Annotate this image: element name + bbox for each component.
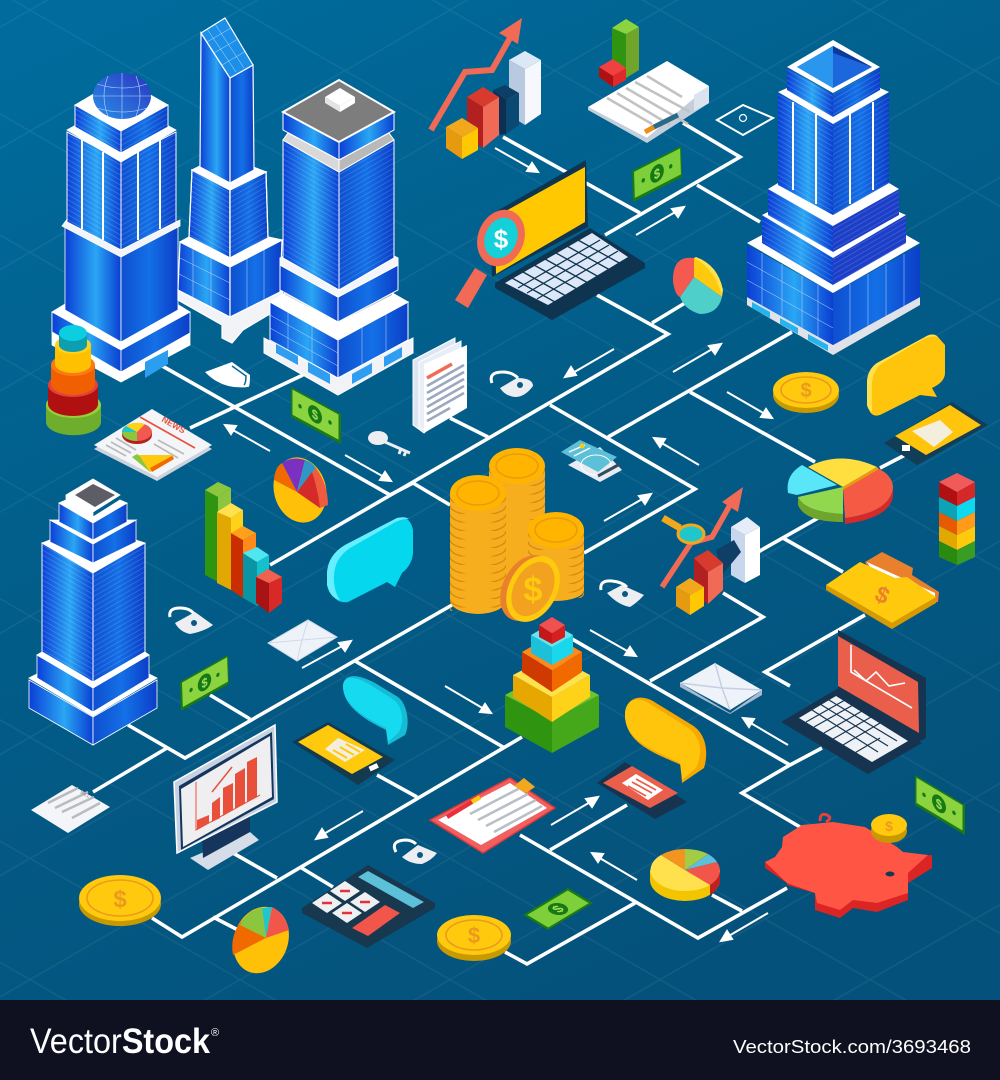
icon: small sun tag bbox=[717, 105, 773, 135]
coin: $ bbox=[468, 923, 480, 948]
pie chart: top bbox=[673, 257, 723, 314]
dome bbox=[93, 73, 151, 119]
pie chart: bottom bbox=[650, 849, 720, 901]
registered mark: ® bbox=[211, 1027, 219, 1039]
icon: money note: $ bbox=[312, 405, 318, 424]
pie chart: bottom left bbox=[224, 899, 298, 981]
coin bbox=[773, 372, 839, 413]
footer bar bbox=[0, 1000, 1000, 1080]
speech bubble: yellow center bbox=[625, 698, 706, 783]
receipt bill: BILL bbox=[79, 790, 91, 800]
bar chart: left bbox=[205, 482, 282, 613]
building: dome tower bbox=[52, 73, 190, 382]
phone: red app bbox=[597, 762, 687, 819]
icon: money note bbox=[915, 775, 965, 835]
big standing coin bbox=[489, 546, 571, 631]
pie chart: large 3d bbox=[788, 458, 893, 524]
coin: left: $ bbox=[113, 886, 127, 913]
newspaper bbox=[94, 409, 212, 481]
folder: $ bbox=[871, 580, 894, 609]
coin bbox=[437, 915, 511, 961]
coin on piggy: $ bbox=[885, 818, 893, 834]
icon: money note bbox=[523, 888, 593, 930]
icon: lock bbox=[491, 372, 533, 397]
phone: bank app right bbox=[884, 402, 988, 465]
icon: money note bbox=[632, 146, 682, 202]
document and cubes: top bbox=[588, 19, 709, 143]
laptop: red screen bbox=[783, 630, 926, 773]
receipt bill bbox=[31, 785, 110, 833]
pie chart: left bbox=[266, 451, 334, 529]
magnifier bbox=[663, 518, 704, 543]
growth chart with magnifier bbox=[662, 487, 760, 615]
speech bubble: cyan large bbox=[327, 517, 413, 602]
pyramid blocks bbox=[505, 617, 599, 753]
growth chart: top bbox=[431, 18, 541, 159]
document stack bbox=[413, 338, 467, 433]
icon: lock bbox=[170, 608, 213, 634]
icon: money note: $ bbox=[548, 903, 568, 915]
building: right hollow tower bbox=[747, 40, 920, 355]
calculator bbox=[302, 865, 435, 948]
credit cards bbox=[561, 440, 622, 482]
roof hut bbox=[325, 88, 355, 112]
building: flat roof tower bbox=[264, 80, 413, 395]
icon: lock bbox=[394, 840, 437, 864]
icon: money note: $ bbox=[201, 674, 208, 692]
icon: lock bbox=[601, 581, 644, 607]
monitor with chart bbox=[174, 725, 277, 870]
icon: money note bbox=[180, 655, 229, 711]
icon: money note: $ bbox=[654, 164, 660, 183]
coin: $ bbox=[800, 380, 812, 402]
icon: envelope left bbox=[268, 620, 337, 661]
magnifier bbox=[455, 202, 533, 308]
folder bbox=[826, 552, 939, 629]
icon: envelope center bbox=[680, 663, 762, 714]
speech bubble: yellow top right bbox=[867, 334, 945, 416]
magnifier: $ bbox=[494, 224, 509, 254]
small direction arrows bbox=[225, 148, 788, 941]
coin on piggy bbox=[871, 814, 907, 843]
brand logo text: VectorStock bbox=[30, 1022, 210, 1061]
big standing coin: $ bbox=[524, 571, 543, 609]
stacked color column bbox=[939, 473, 975, 565]
clipboard bbox=[430, 778, 555, 853]
coin stacks bbox=[450, 448, 584, 631]
laptop with magnifier bbox=[455, 160, 645, 320]
flow connector lines bbox=[93, 123, 905, 964]
phone: bank app left bbox=[292, 722, 395, 785]
speech bubble: cyan small bbox=[343, 676, 408, 745]
newspaper: NEWS bbox=[160, 414, 187, 436]
image id text: VectorStock.com/3693468 bbox=[733, 1037, 971, 1057]
icon: money note bbox=[291, 387, 341, 444]
icon: key bbox=[368, 431, 410, 456]
icon: money note: $ bbox=[936, 795, 943, 814]
stacked cylinders bbox=[46, 325, 101, 435]
coin: left bbox=[79, 875, 161, 926]
building: left lower stepped tower bbox=[29, 479, 157, 745]
icon: shield bbox=[205, 362, 250, 387]
piggy bank bbox=[765, 814, 932, 918]
building: blade tower bbox=[178, 18, 285, 343]
